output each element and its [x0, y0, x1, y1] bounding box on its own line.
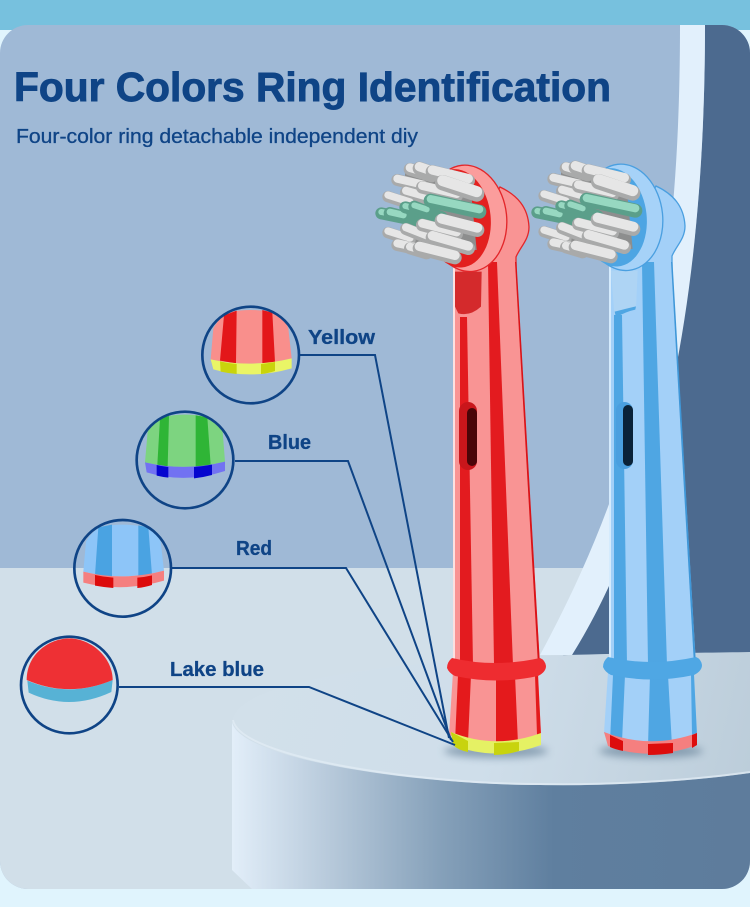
- water slot: [616, 402, 633, 469]
- head disc and bristles: [381, 161, 512, 314]
- red ring: [604, 732, 697, 754]
- red brush head: [381, 161, 548, 758]
- label: blue: Blue: [268, 432, 311, 454]
- bottom background band: [0, 880, 750, 907]
- neck stripe left: [460, 317, 473, 665]
- label: lake blue: Lake blue: [170, 659, 264, 681]
- collar: [447, 658, 546, 680]
- leader line: yellow: [300, 355, 449, 738]
- leader line: lake blue: [119, 687, 455, 745]
- detail circle: yellow ring: [202, 307, 299, 403]
- dark right wall: [560, 25, 750, 660]
- collar: [603, 657, 702, 680]
- neck edge highlight: [609, 262, 611, 665]
- yellow ring: [451, 732, 541, 754]
- neck: [454, 262, 540, 665]
- neck highlight edge: [453, 262, 455, 665]
- lower body: [604, 672, 697, 744]
- neck edge stripe: [515, 262, 540, 665]
- detail circle: lake blue ring: [21, 637, 118, 733]
- white curved band: [540, 25, 705, 655]
- lower stripes: [610, 675, 697, 746]
- water slot: [459, 402, 477, 470]
- podium rim highlight: [233, 720, 750, 784]
- neck stripe left: [614, 315, 627, 665]
- neck: [610, 262, 696, 665]
- head back: [611, 186, 685, 280]
- label: red: Red: [236, 538, 272, 560]
- base shadow: [599, 744, 703, 758]
- head disc and bristles: [537, 160, 668, 317]
- neck edge stripe: [671, 262, 696, 665]
- podium top surface: [560, 652, 750, 783]
- red ring dark segments: [610, 733, 697, 755]
- lower stripes: [455, 675, 541, 744]
- neck stripe centre: [488, 262, 513, 665]
- head back: [455, 187, 529, 280]
- top background band: [0, 0, 750, 30]
- detail circle: red ring: [74, 520, 171, 617]
- neck stripe centre: [642, 262, 667, 665]
- base shadow: [444, 744, 548, 758]
- subtitle: Four-color ring detachable independent diy: [16, 126, 418, 148]
- detail circle: blue ring: [137, 412, 233, 508]
- leader line: blue: [235, 461, 451, 740]
- floor: [0, 568, 583, 889]
- yellow ring dark segments: [451, 732, 519, 755]
- lower body: [449, 672, 541, 745]
- blue brush head: [537, 160, 703, 758]
- title: Four Colors Ring Identification: [14, 64, 611, 110]
- podium side: [232, 722, 750, 889]
- leader line: red: [172, 568, 453, 742]
- label: yellow: Yellow: [308, 327, 375, 349]
